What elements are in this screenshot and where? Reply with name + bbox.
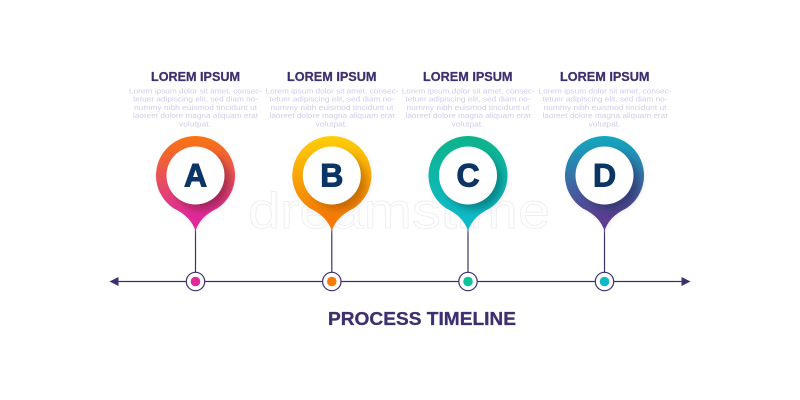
stem D — [604, 228, 606, 272]
text block B: tetuer adipiscing elit, sed diam no- — [270, 94, 395, 104]
step D — [538, 70, 672, 291]
arrow: left — [110, 277, 118, 286]
node D — [595, 272, 614, 291]
letter C: C — [456, 158, 480, 194]
text block B: laoreet dolore magna aliquam erat — [270, 111, 395, 120]
pin A — [156, 136, 236, 232]
text block B: Lorem ipsum dolor sit amet, consec- — [266, 86, 399, 96]
pin D — [565, 136, 646, 232]
text block A: laoreet dolore magna aliquam erat — [133, 111, 259, 120]
heading B: LOREM IPSUM — [287, 70, 376, 84]
text block C: laoreet dolore magna aliquam erat — [406, 111, 531, 120]
text block B: volutpat. — [316, 120, 348, 128]
text block A: volutpat. — [179, 120, 211, 128]
text block D: Lorem ipsum dolor sit amet, consec- — [538, 86, 672, 96]
text block D — [538, 86, 672, 128]
heading C: LOREM IPSUM — [423, 70, 512, 84]
text block A: tetuer adipiscing elit, sed diam no- — [133, 94, 259, 104]
text block A: nummy nibh euismod tincidunt ut — [134, 103, 258, 112]
step C — [402, 70, 535, 291]
heading D: LOREM IPSUM — [560, 70, 650, 84]
step B — [266, 70, 399, 291]
arrow: right — [682, 277, 690, 286]
pin C — [428, 136, 509, 232]
text block D: laoreet dolore magna aliquam erat — [542, 111, 668, 120]
stem C — [467, 228, 469, 272]
text block C: Lorem ipsum dolor sit amet, consec- — [402, 86, 535, 96]
node B — [323, 272, 341, 291]
step A — [129, 70, 263, 291]
node A — [186, 272, 205, 291]
text block B: nummy nibh euismod tincidunt ut — [270, 103, 394, 112]
text block A: Lorem ipsum dolor sit amet, consec- — [129, 86, 263, 96]
text block C: nummy nibh euismod tincidunt ut — [406, 103, 530, 112]
title: PROCESS TIMELINE — [328, 308, 516, 329]
text block C: tetuer adipiscing elit, sed diam no- — [406, 94, 531, 104]
pin B — [292, 136, 373, 232]
stem A — [194, 228, 196, 272]
text block C: volutpat. — [452, 120, 484, 128]
text block A — [129, 86, 263, 128]
text block D: nummy nibh euismod tincidunt ut — [544, 103, 667, 112]
watermark: dreamstime — [248, 183, 550, 239]
heading A: LOREM IPSUM — [151, 70, 240, 84]
text block D: tetuer adipiscing elit, sed diam no- — [542, 94, 668, 104]
text block B — [266, 86, 399, 128]
text block C — [402, 86, 535, 128]
stem B — [331, 228, 333, 272]
node C — [459, 272, 477, 291]
letter D: D — [593, 158, 616, 194]
text block D: volutpat. — [588, 120, 620, 128]
letter A: A — [184, 158, 207, 194]
letter B: B — [320, 158, 343, 194]
timeline axis — [110, 277, 690, 286]
